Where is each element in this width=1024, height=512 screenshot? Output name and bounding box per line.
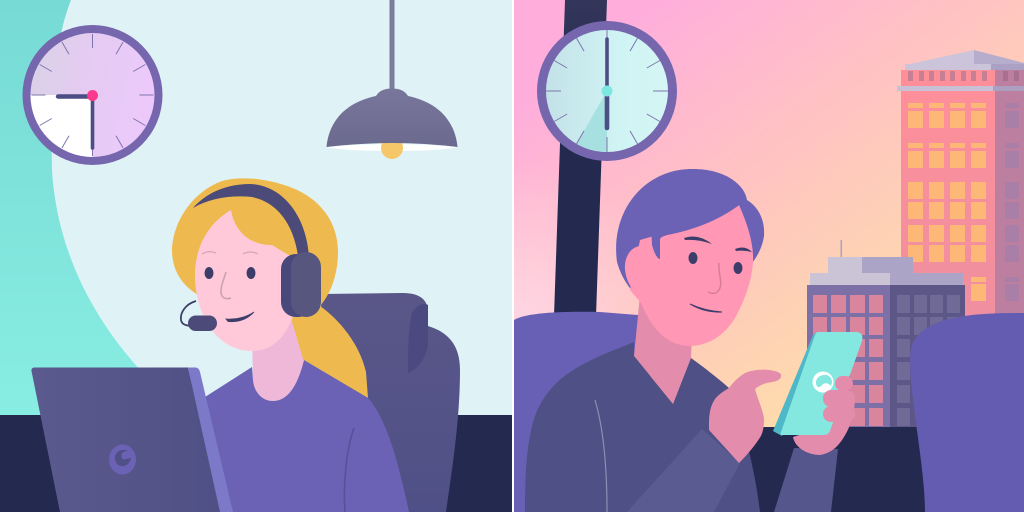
far forearm	[774, 448, 838, 512]
ear	[625, 240, 665, 300]
holding hand palm	[793, 390, 855, 455]
tall pink tower	[897, 50, 1024, 330]
sunset background	[514, 0, 1024, 427]
laptop edge	[188, 368, 233, 512]
chair headrest fold	[408, 304, 428, 373]
phone logo	[812, 372, 834, 392]
eyes	[204, 267, 256, 279]
floor band	[0, 415, 512, 512]
neck	[252, 315, 304, 401]
eyes	[688, 252, 742, 274]
gripping fingers	[823, 376, 855, 450]
nose	[221, 272, 231, 299]
panel: right evening commute	[514, 0, 1024, 512]
sweater crease	[595, 400, 607, 512]
mouth	[226, 312, 254, 322]
floor band	[749, 427, 925, 512]
dark pillar	[554, 0, 607, 316]
sweater torso	[525, 342, 760, 512]
face	[630, 205, 753, 346]
tower dentils	[908, 71, 1019, 81]
teal curved wall shape	[0, 0, 142, 416]
short building front windows	[813, 295, 883, 426]
mouth	[690, 304, 722, 312]
nose	[708, 263, 721, 293]
sleeve crease	[344, 428, 354, 512]
sleeve	[627, 429, 740, 512]
office chair	[320, 293, 460, 512]
ear cup	[281, 252, 321, 317]
sweater torso	[205, 360, 409, 512]
pointing hand	[709, 370, 781, 463]
tower roof	[910, 50, 974, 64]
hair back	[172, 178, 368, 398]
wall clock: nine fifteen style	[22, 25, 162, 165]
hair fringe	[650, 180, 745, 259]
neck	[634, 295, 692, 404]
man with phone	[525, 169, 862, 512]
hair bangs	[231, 210, 298, 256]
sunset highlight	[514, 204, 639, 320]
tower side windows	[1005, 103, 1019, 301]
eyebrows	[202, 252, 258, 254]
short building side windows	[897, 295, 960, 426]
pendant lamp	[326, 0, 458, 159]
phone	[773, 332, 862, 436]
right seat back	[910, 313, 1024, 512]
left seat back	[514, 312, 650, 512]
tower front windows	[908, 103, 986, 301]
wall background	[52, 0, 512, 415]
short purple building	[807, 240, 965, 427]
microphone	[181, 301, 217, 331]
hair back	[616, 169, 764, 300]
eyebrows	[684, 236, 752, 252]
laptop	[31, 368, 233, 512]
woman with headset	[172, 178, 409, 512]
panel: left daytime office	[0, 0, 512, 512]
wall clock: six o'clock	[537, 21, 677, 161]
headband	[193, 184, 309, 256]
panel divider	[512, 0, 514, 512]
laptop logo	[109, 444, 136, 474]
face	[195, 210, 298, 351]
